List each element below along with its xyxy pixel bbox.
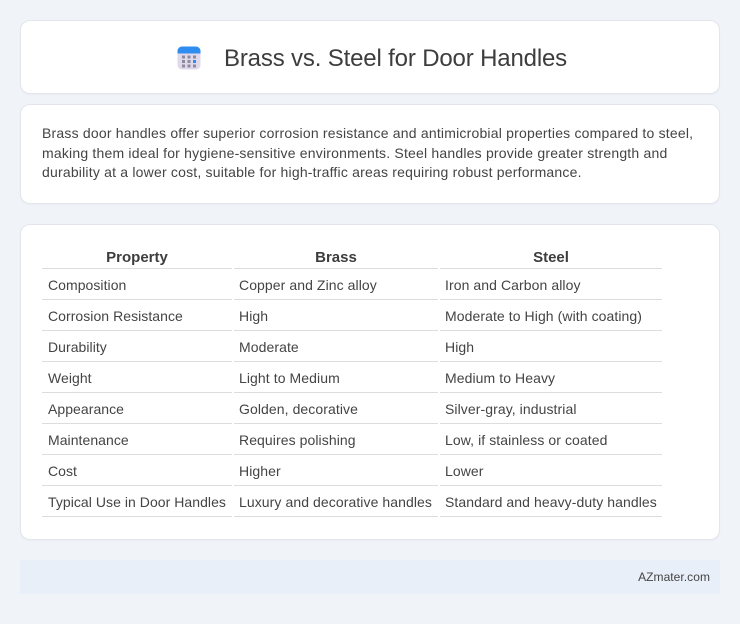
intro text: making them ideal for hygiene-sensitive environments. Steel handles provide greater strength and bbox=[42, 145, 667, 161]
comparison table: Requires polishing bbox=[239, 432, 356, 448]
comparison table: High bbox=[445, 339, 474, 355]
comparison table: Durability bbox=[48, 339, 107, 355]
comparison table: Luxury and decorative handles bbox=[239, 494, 432, 510]
comparison table: Typical Use in Door Handles bbox=[48, 494, 226, 510]
comparison table: Light to Medium bbox=[239, 370, 340, 386]
comparison table: Composition bbox=[48, 277, 126, 293]
comparison table: Medium to Heavy bbox=[445, 370, 555, 386]
comparison table: Iron and Carbon alloy bbox=[445, 277, 581, 293]
comparison table: Standard and heavy-duty handles bbox=[445, 494, 657, 510]
intro text: durability at a lower cost, suitable for high-traffic areas requiring robust performance. bbox=[42, 164, 582, 180]
comparison table: Brass bbox=[315, 249, 357, 266]
table card bbox=[20, 224, 720, 540]
comparison table bbox=[42, 249, 662, 517]
comparison table: Copper and Zinc alloy bbox=[239, 277, 377, 293]
comparison table: Silver-gray, industrial bbox=[445, 401, 577, 417]
comparison table: Maintenance bbox=[48, 432, 129, 448]
intro text bbox=[42, 125, 693, 180]
comparison table: Corrosion Resistance bbox=[48, 308, 183, 324]
header card bbox=[20, 20, 720, 94]
comparison table: Property bbox=[106, 249, 168, 266]
footer: AZmater.com bbox=[638, 570, 710, 584]
comparison table: Higher bbox=[239, 463, 281, 479]
comparison table: Appearance bbox=[48, 401, 124, 417]
comparison table: Low, if stainless or coated bbox=[445, 432, 607, 448]
comparison table: Golden, decorative bbox=[239, 401, 358, 417]
intro text: Brass door handles offer superior corrosion resistance and antimicrobial properties compared to steel, bbox=[42, 125, 693, 141]
comparison table: Moderate to High (with coating) bbox=[445, 308, 642, 324]
intro card bbox=[20, 104, 720, 204]
footer bbox=[20, 560, 720, 594]
comparison table: Moderate bbox=[239, 339, 299, 355]
comparison table: Weight bbox=[48, 370, 92, 386]
title: Brass vs. Steel for Door Handles bbox=[224, 45, 567, 72]
comparison table: Steel bbox=[533, 249, 569, 266]
comparison table: Cost bbox=[48, 463, 77, 479]
icon: calendar bbox=[178, 46, 200, 70]
comparison table: High bbox=[239, 308, 268, 324]
comparison table: Lower bbox=[445, 463, 484, 479]
